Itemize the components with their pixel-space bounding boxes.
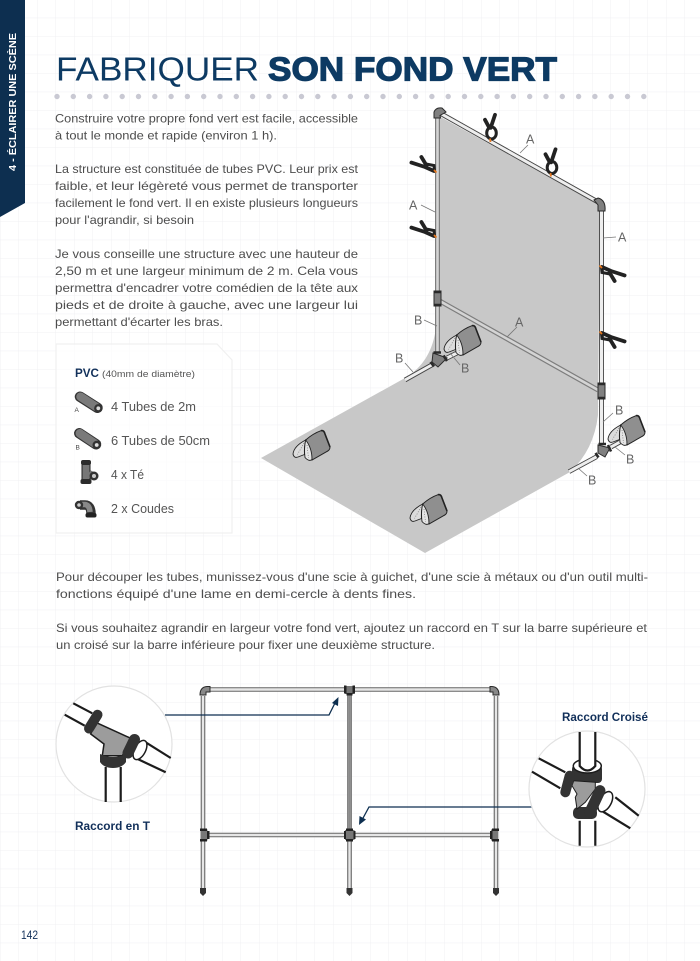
title: SON FOND VERT — [268, 52, 558, 88]
intro text: Je vous conseille une structure avec une hauteur de — [55, 247, 358, 261]
icon: tube A: A — [74, 407, 80, 414]
item: 4 tubes: 4 Tubes de 2m — [111, 399, 196, 414]
intro text: à tout le monde et rapide (environ 1 h). — [55, 128, 277, 142]
part labels: B — [626, 452, 634, 466]
fitting collars — [430, 292, 611, 458]
dotted divider — [57, 94, 645, 99]
spring clamps — [411, 157, 436, 172]
intro text: permettant d'écarter les bras. — [55, 315, 223, 329]
intro text: Construire votre propre fond vert est facile, accessible — [55, 112, 358, 126]
lower text: un croisé sur la barre inférieure pour fixer une deuxième structure. — [56, 638, 435, 652]
lower text: Si vous souhaitez agrandir en largeur votre fond vert, ajoutez un raccord en T sur la barre supérieure et — [56, 621, 648, 635]
title — [56, 52, 558, 88]
corner fittings — [200, 686, 499, 695]
icon: tube B — [76, 433, 101, 452]
tubes: grey on rear — [405, 112, 620, 472]
part labels: B — [395, 352, 403, 366]
part labels: A — [526, 132, 535, 146]
part labels: A — [409, 198, 418, 212]
lower text: Pour découper les tubes, munissez-vous d'une scie à guichet, d'une scie à métaux ou d'un outil multi- — [56, 570, 648, 584]
part labels — [395, 132, 634, 488]
panel: PVC materials list — [56, 344, 232, 533]
intro text: 2,50 m et une largeur minimum de 2 m. Cela vous — [55, 264, 358, 278]
label: Raccord Croisé: Raccord Croisé — [562, 710, 648, 724]
sandbags — [293, 431, 330, 460]
chapter side tab — [0, 0, 25, 217]
leader lines — [405, 145, 625, 476]
corner and T fittings — [432, 108, 610, 457]
part labels: B — [461, 362, 469, 376]
intro text: La structure est constituée de tubes PVC. Leur prix est — [55, 162, 359, 176]
detail circle: cross connector — [529, 731, 645, 847]
lower text: fonctions équipé d'une lame en demi-cercle à dents fines. — [56, 587, 416, 601]
intro text: pour l'agrandir, si besoin — [55, 213, 194, 227]
page number: 142 — [21, 930, 38, 942]
item: T connectors: 4 x Té — [111, 467, 144, 482]
icon: tube A — [74, 397, 103, 414]
intro text: facilement le fond vert. Il en existe plusieurs longueurs — [55, 196, 358, 210]
part labels: B — [414, 314, 422, 328]
T fittings and cross fittings — [200, 686, 498, 840]
intro text: pieds et de droite à gauche, avec une largeur lui — [55, 298, 358, 312]
intro text: permettra d'encadrer votre comédien de la tête aux — [55, 281, 358, 295]
tube feet — [200, 888, 499, 896]
intro text: faible, et leur légèreté vous permet de transporter — [55, 179, 358, 193]
arrow: cross connector pointer — [359, 807, 532, 825]
PVC heading: (40mm de diamètre) — [102, 369, 195, 380]
chapter side tab: 4 - ÉCLAIRER UNE SCÈNE — [6, 33, 19, 171]
part labels: A — [515, 316, 524, 330]
part labels: B — [588, 474, 596, 488]
icon: tube B: B — [76, 444, 80, 452]
arrow: T connector pointer — [165, 697, 338, 715]
lower text — [56, 570, 648, 652]
diagram: double frame — [200, 686, 499, 896]
PVC heading — [75, 366, 195, 380]
illustration: green screen setup — [261, 108, 645, 553]
item: 6 tubes: 6 Tubes de 50cm — [111, 433, 210, 448]
label: Raccord en T: Raccord en T — [75, 819, 151, 833]
item: elbows: 2 x Coudes — [111, 501, 174, 516]
part labels: B — [615, 404, 623, 418]
PVC heading: PVC — [75, 366, 99, 380]
title: FABRIQUER — [56, 52, 259, 88]
icon: T connector — [80, 460, 98, 484]
intro text — [55, 112, 359, 329]
icon: elbow — [75, 501, 96, 518]
backdrop sheet — [261, 115, 600, 553]
part labels: A — [618, 230, 627, 244]
detail circle: T connector — [56, 686, 172, 802]
